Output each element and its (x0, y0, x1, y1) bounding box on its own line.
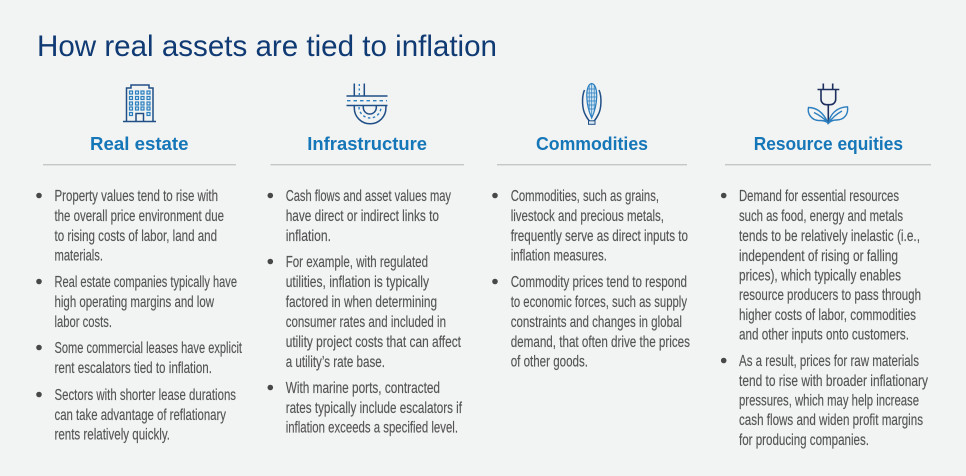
bullet list: commodities: constraints and changes in global (511, 314, 682, 331)
bullet list: commodities: to economic forces, such as supply (511, 294, 687, 311)
panel: resource equities (721, 84, 931, 449)
bullet list: infrastructure: utility project costs that can affect (286, 334, 461, 351)
bullet list: infrastructure: For example, with regulated (286, 254, 428, 271)
bullet list: real estate: rent escalators tied to inflation. (54, 360, 212, 377)
bullet list: infrastructure: With marine ports, contracted (286, 380, 440, 397)
icon: corn cob (583, 84, 601, 124)
panel: commodities (492, 84, 690, 370)
bullet list: resource equities: and other inputs onto customers. (739, 326, 909, 344)
bullet list: commodities: frequently serve as direct inputs to (511, 228, 688, 245)
bullet list: resource equities: Demand for essential resources (739, 188, 899, 205)
bullet list: real estate: labor costs. (54, 314, 112, 331)
icon: road interchange (346, 84, 388, 124)
bullet list: resource equities (721, 188, 928, 449)
bullet list: infrastructure: rates typically include escalators if (286, 400, 462, 417)
panel: real estate (36, 85, 242, 444)
bullet list: resource equities: prices), which typically enables (739, 268, 901, 284)
bullet list: real estate: high operating margins and low (54, 294, 214, 311)
bullet list: commodities: inflation measures. (511, 248, 607, 264)
bullet list: commodities: Commodity prices tend to respond (511, 274, 687, 291)
bullet list: commodities (492, 188, 690, 370)
bullet list: resource equities: for producing companies. (739, 432, 869, 449)
bullet list: resource equities: independent of rising or falling (739, 248, 898, 265)
bullet list: real estate: can take advantage of reflationary (54, 407, 226, 424)
bullet list: infrastructure: inflation. (286, 228, 331, 245)
bullet list: infrastructure (268, 188, 462, 436)
heading: real estate: Real estate (90, 133, 188, 154)
heading: infrastructure: Infrastructure (307, 133, 427, 154)
bullet list: infrastructure: inflation exceeds a specified level. (286, 420, 458, 436)
icon: plug with leaves (808, 84, 848, 124)
bullet list: real estate: Sectors with shorter lease durations (54, 387, 236, 404)
bullet list: infrastructure: factored in when determining (286, 294, 437, 311)
bullet list: real estate: to rising costs of labor, land and (54, 228, 217, 245)
bullet list: real estate: rents relatively quickly. (54, 426, 170, 444)
bullet list: commodities: of other goods. (511, 354, 588, 370)
panel: infrastructure (268, 84, 464, 436)
bullet list: infrastructure: consumer rates and included in (286, 314, 446, 331)
bullet list: real estate (36, 188, 242, 444)
heading: resource equities: Resource equities (754, 133, 903, 154)
icon: office building (123, 85, 156, 122)
bullet list: real estate: Some commercial leases have explicit (54, 340, 242, 357)
bullet list: resource equities: such as food, energy and metals (739, 208, 903, 225)
heading: commodities: Commodities (536, 133, 648, 154)
title: How real assets are tied to inflation (37, 30, 497, 63)
bullet list: real estate: Property values tend to rise with (54, 188, 218, 205)
bullet list: commodities: livestock and precious metals, (511, 208, 664, 225)
bullet list: real estate: Real estate companies typically have (54, 274, 237, 291)
bullet list: infrastructure: utilities, inflation is typically (286, 274, 429, 291)
bullet list: commodities: Commodities, such as grains, (511, 188, 659, 205)
bullet list: commodities: demand, that often drive the prices (511, 334, 690, 351)
bullet list: infrastructure: have direct or indirect links to (286, 208, 439, 225)
bullet list: infrastructure: a utility’s rate base. (286, 354, 385, 371)
bullet list: infrastructure: Cash flows and asset values may (286, 188, 451, 205)
bullet list: real estate: the overall price environment due (54, 208, 224, 225)
bullet list: real estate: materials. (54, 248, 103, 264)
